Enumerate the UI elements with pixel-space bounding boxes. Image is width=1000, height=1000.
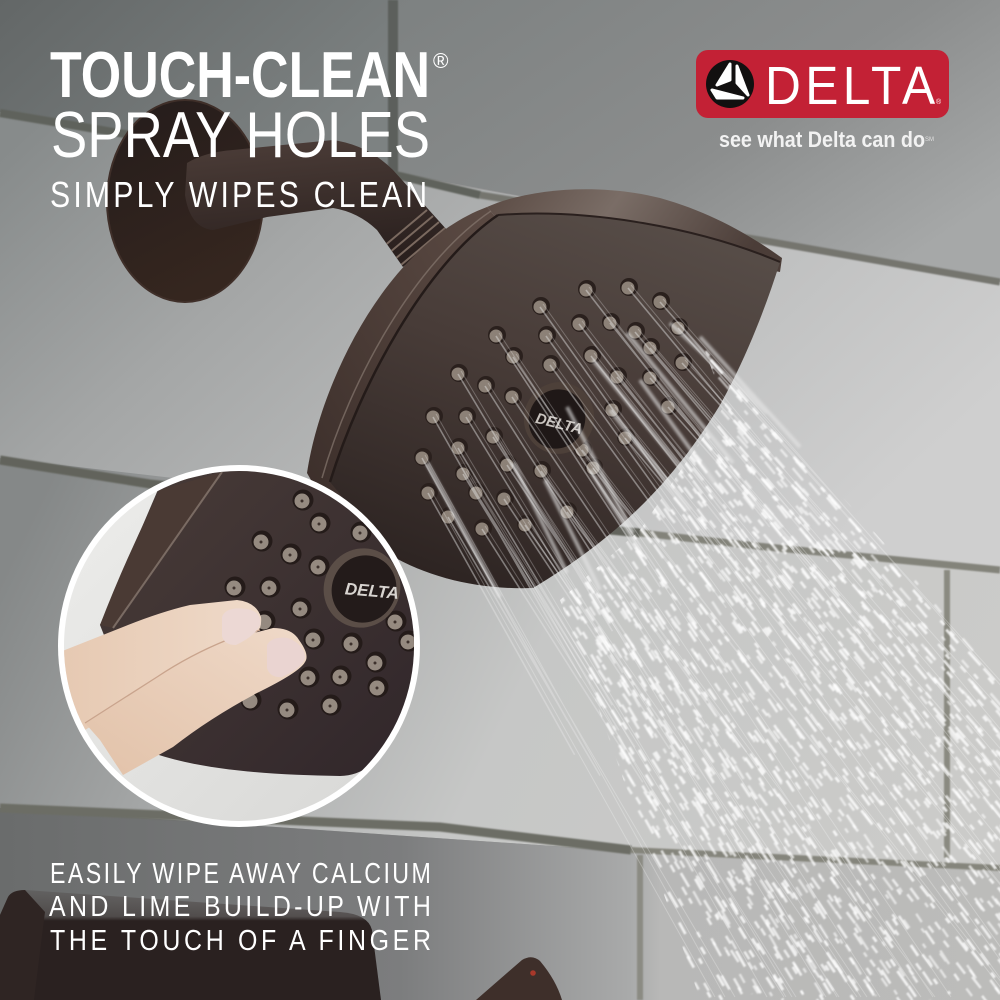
scattered droplets (560, 350, 1000, 1000)
title: Spray Holes: SPRAY HOLES (51, 98, 430, 171)
head back rim (487, 189, 782, 272)
tagline: see what Delta can do (719, 127, 925, 152)
body copy: EASILY WIPE AWAY CALCIUM (50, 856, 431, 890)
head face (330, 214, 780, 588)
center logo disc: DELTA (534, 410, 584, 438)
thin jets leaving the nozzles (422, 288, 1000, 1000)
inset logo disc: DELTA (344, 579, 400, 603)
faucet handle, bottom center (476, 957, 562, 1000)
inset head (100, 471, 414, 776)
inset circle: fingers wiping spray holes (58, 465, 420, 827)
Delta logo (696, 50, 949, 118)
tagline: SM (925, 137, 934, 143)
Delta logo: ® (936, 98, 942, 106)
body copy: AND LIME BUILD-UP WITH (49, 890, 431, 922)
logo wordmark: DELTA (765, 55, 936, 115)
shower arm flange (107, 100, 263, 302)
faucet trim plate, bottom left (0, 890, 381, 1000)
title: Touch-Clean: TOUCH-CLEAN (50, 38, 430, 111)
center logo disc (512, 371, 606, 465)
finger: upper (60, 600, 261, 730)
title: Touch-Clean: ® (433, 50, 449, 73)
water spray (410, 282, 1000, 1000)
inset nozzles (234, 500, 409, 710)
subtitle: SIMPLY WIPES CLEAN (50, 176, 427, 216)
inset logo disc (324, 548, 400, 628)
fingernail: lower (267, 638, 305, 677)
finger: lower (85, 628, 307, 775)
logo mark (706, 60, 754, 108)
fingernail: upper (222, 608, 260, 645)
shower head (307, 189, 782, 588)
body copy: THE TOUCH OF A FINGER (50, 924, 431, 956)
spray nozzles (422, 287, 683, 529)
head side (307, 207, 498, 540)
bright streaks over the head (427, 323, 800, 597)
pipe threads (383, 210, 445, 265)
body copy (49, 856, 431, 956)
shower arm (185, 140, 447, 267)
